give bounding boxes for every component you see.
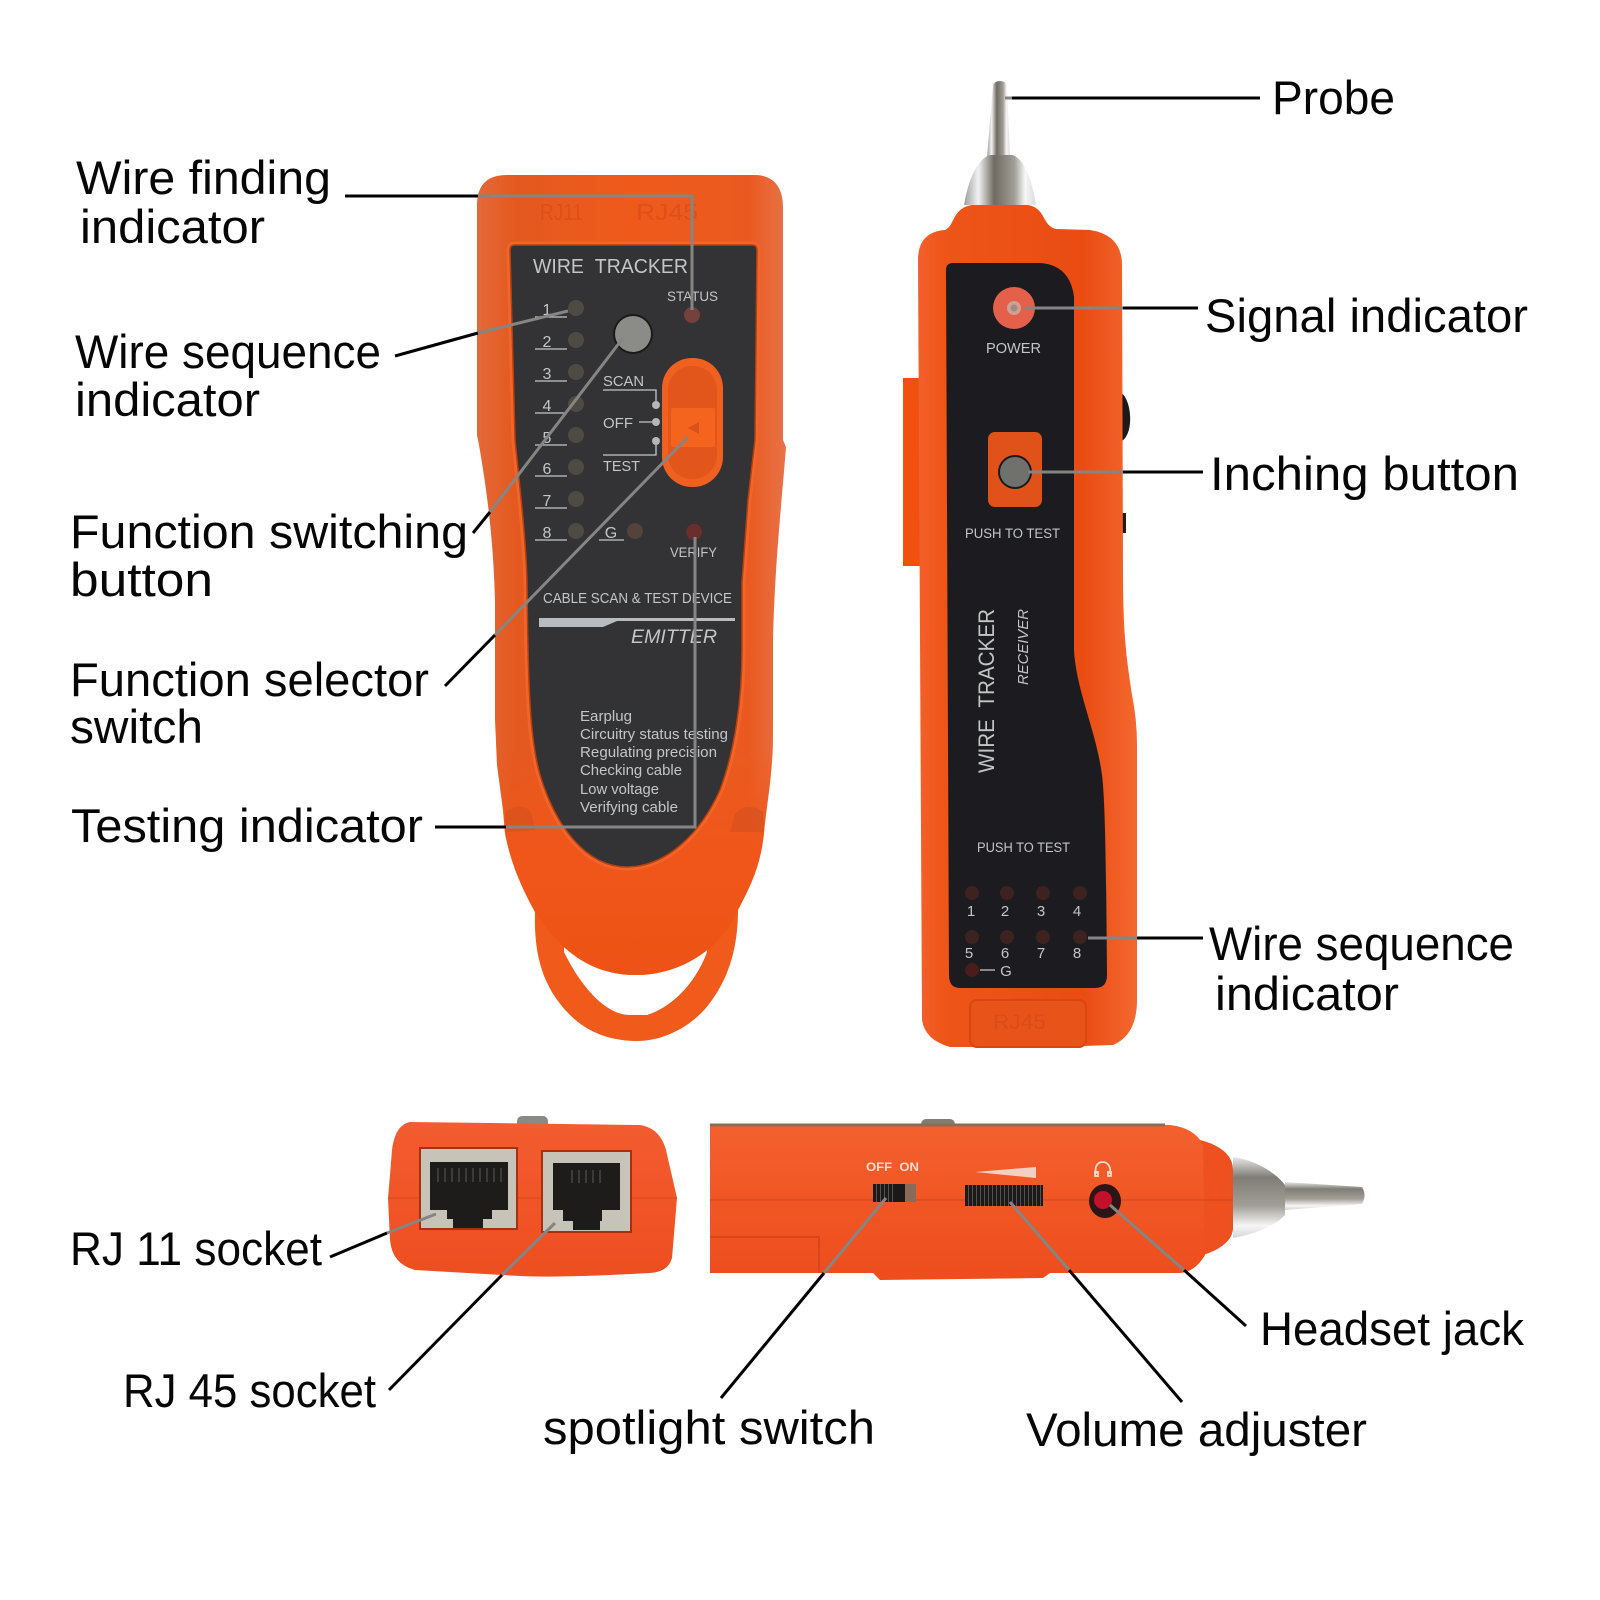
numbered LEDs 1 to 8 and G: 7: [543, 493, 552, 510]
faceplate bevel: [510, 245, 757, 867]
callout: function switching button: button: [70, 553, 213, 606]
chrome nose: [1233, 1157, 1285, 1238]
function switching button: [613, 314, 653, 354]
spotlight slide switch: [873, 1184, 916, 1202]
callout: function selector switch: switch: [70, 700, 203, 753]
numbered LEDs 1 to 8 and G: 5: [543, 430, 552, 447]
off on label: OFF ON: [866, 1160, 919, 1174]
grip ribs: [505, 807, 764, 832]
callout: headset jack: Headset jack: [1260, 1302, 1524, 1355]
callout: probe: Probe: [1272, 71, 1395, 124]
push to test label: PUSH TO TEST: [965, 526, 1060, 541]
emitter faceplate: [510, 245, 757, 867]
switch position labels: [603, 373, 660, 475]
status indicator: STATUS: [667, 288, 718, 304]
chrome cone: [964, 155, 1036, 205]
embossed RJ11 RJ45 marks: RJ11: [540, 199, 583, 225]
power label: POWER: [986, 341, 1041, 357]
status indicator: [667, 288, 718, 323]
volume wheel: [965, 1185, 1043, 1206]
probe pin: [1285, 1182, 1364, 1210]
side thumb wheel: [1120, 392, 1130, 442]
numbered LEDs 1 to 8 and G: 1: [543, 302, 552, 319]
callout: testing indicator: [71, 537, 695, 852]
callout: spotlight switch: spotlight switch: [543, 1401, 875, 1454]
receiver LED grid: 3: [1037, 903, 1045, 920]
RJ45 port: [419, 1147, 518, 1230]
callout: volume adjuster: [1010, 1202, 1367, 1456]
callout: wire finding indicator: indicator: [80, 200, 265, 253]
vertical wire tracker label: WIRE TRACKER: [974, 609, 999, 773]
status legend list: Regulating precision: [580, 745, 717, 761]
callout: wire sequence indicator right: Wire sequence: [1209, 917, 1514, 970]
numbered LEDs 1 to 8 and G: G: [605, 525, 617, 542]
numbered LEDs 1 to 8 and G: [535, 300, 643, 542]
callout: function switching button: Function switching: [70, 505, 468, 558]
status legend list: Circuitry status testing: [580, 727, 728, 743]
RJ45 end tab: [970, 1000, 1086, 1047]
embossed RJ11 RJ45 marks: [540, 199, 698, 225]
receiver LED grid: 8: [1073, 945, 1081, 962]
callout: function switching button: [70, 338, 623, 606]
switch position labels: TEST: [603, 458, 640, 475]
second push to test label: PUSH TO TEST: [977, 840, 1070, 855]
callout: wire finding indicator: Wire finding: [76, 151, 331, 204]
orange collar: [1200, 1140, 1233, 1255]
receiver LED grid: 6: [1001, 945, 1009, 962]
callout: headset jack: [1110, 1205, 1524, 1355]
probe tip: [987, 81, 1010, 157]
side clip: [903, 378, 921, 566]
callout: function selector switch: Function selector: [70, 653, 429, 706]
RJ45 end tab: RJ45: [993, 1011, 1046, 1034]
end housing: [388, 1122, 677, 1277]
callout: RJ 11 socket: [70, 1214, 436, 1275]
callout: spotlight switch: [543, 1198, 886, 1454]
receiver LED grid: 5: [965, 945, 973, 962]
receiver LED grid: 2: [1001, 903, 1009, 920]
receiver LED grid: 1: [967, 903, 975, 920]
status legend list: Checking cable: [580, 763, 682, 779]
faceplate title: WIRE TRACKER: [533, 256, 688, 278]
callout: testing indicator: Testing indicator: [71, 799, 423, 852]
numbered LEDs 1 to 8 and G: 2: [543, 334, 552, 351]
callout: RJ 45 socket: RJ 45 socket: [123, 1364, 376, 1417]
verify indicator: [670, 524, 718, 560]
numbered LEDs 1 to 8 and G: 6: [543, 461, 552, 478]
callout: RJ 45 socket: [123, 1223, 555, 1417]
callout: volume adjuster: Volume adjuster: [1026, 1403, 1367, 1456]
status legend list: [580, 709, 728, 816]
side nub: [921, 1119, 955, 1131]
callout: RJ 11 socket: RJ 11 socket: [70, 1222, 322, 1275]
verify indicator: VERIFY: [670, 544, 718, 560]
signal LED: [993, 287, 1035, 329]
emitter bar and label: EMITTER: [631, 627, 717, 648]
status legend list: Low voltage: [580, 782, 659, 798]
side switch: [1121, 513, 1126, 533]
emitter device front view: [477, 175, 786, 1041]
receiver body: [918, 205, 1137, 1047]
top nub: [517, 1116, 548, 1128]
function selector switch: [662, 358, 723, 487]
switch position labels: OFF: [603, 415, 633, 432]
device description: CABLE SCAN & TEST DEVICE: [543, 591, 732, 607]
vertical receiver label: RECEIVER: [1016, 608, 1032, 685]
receiver LED grid: [965, 886, 1087, 980]
carrying loop: [535, 910, 738, 1041]
callout: wire sequence indicator left: indicator: [75, 373, 260, 426]
numbered LEDs 1 to 8 and G: 3: [543, 366, 552, 383]
numbered LEDs 1 to 8 and G: 4: [543, 398, 552, 415]
emitter end view with sockets: [388, 1116, 677, 1277]
numbered LEDs 1 to 8 and G: 8: [543, 525, 552, 542]
volume wedge: [975, 1167, 1036, 1178]
embossed RJ11 RJ45 marks: RJ45: [636, 199, 698, 225]
receiver LED grid: 7: [1037, 945, 1045, 962]
status legend list: Earplug: [580, 709, 632, 725]
headset icon: [1095, 1162, 1111, 1176]
headset jack: [1089, 1184, 1121, 1218]
callout: wire sequence indicator right: [1088, 917, 1514, 1020]
receiver side view: [710, 1119, 1364, 1280]
callout: signal indicator: Signal indicator: [1205, 289, 1528, 342]
side body: [710, 1125, 1205, 1280]
callout: inching button: Inching button: [1210, 447, 1519, 500]
receiver LED grid: 4: [1073, 903, 1081, 920]
RJ11 port: [541, 1150, 632, 1233]
receiver faceplate: [946, 263, 1107, 988]
switch position labels: SCAN: [603, 373, 644, 390]
callout: function selector switch: [70, 437, 688, 753]
callout: wire sequence indicator right: indicator: [1215, 967, 1399, 1020]
receiver LED grid: G: [1000, 963, 1012, 980]
inching button: [988, 432, 1042, 507]
status legend list: Verifying cable: [580, 800, 678, 816]
callout: wire sequence indicator left: [75, 311, 568, 426]
callout: wire sequence indicator left: Wire sequence: [75, 325, 381, 378]
emitter bar and label: [539, 618, 735, 648]
callout: wire finding indicator: [76, 151, 692, 310]
emitter body: [477, 175, 786, 975]
receiver device front view: [903, 81, 1137, 1047]
